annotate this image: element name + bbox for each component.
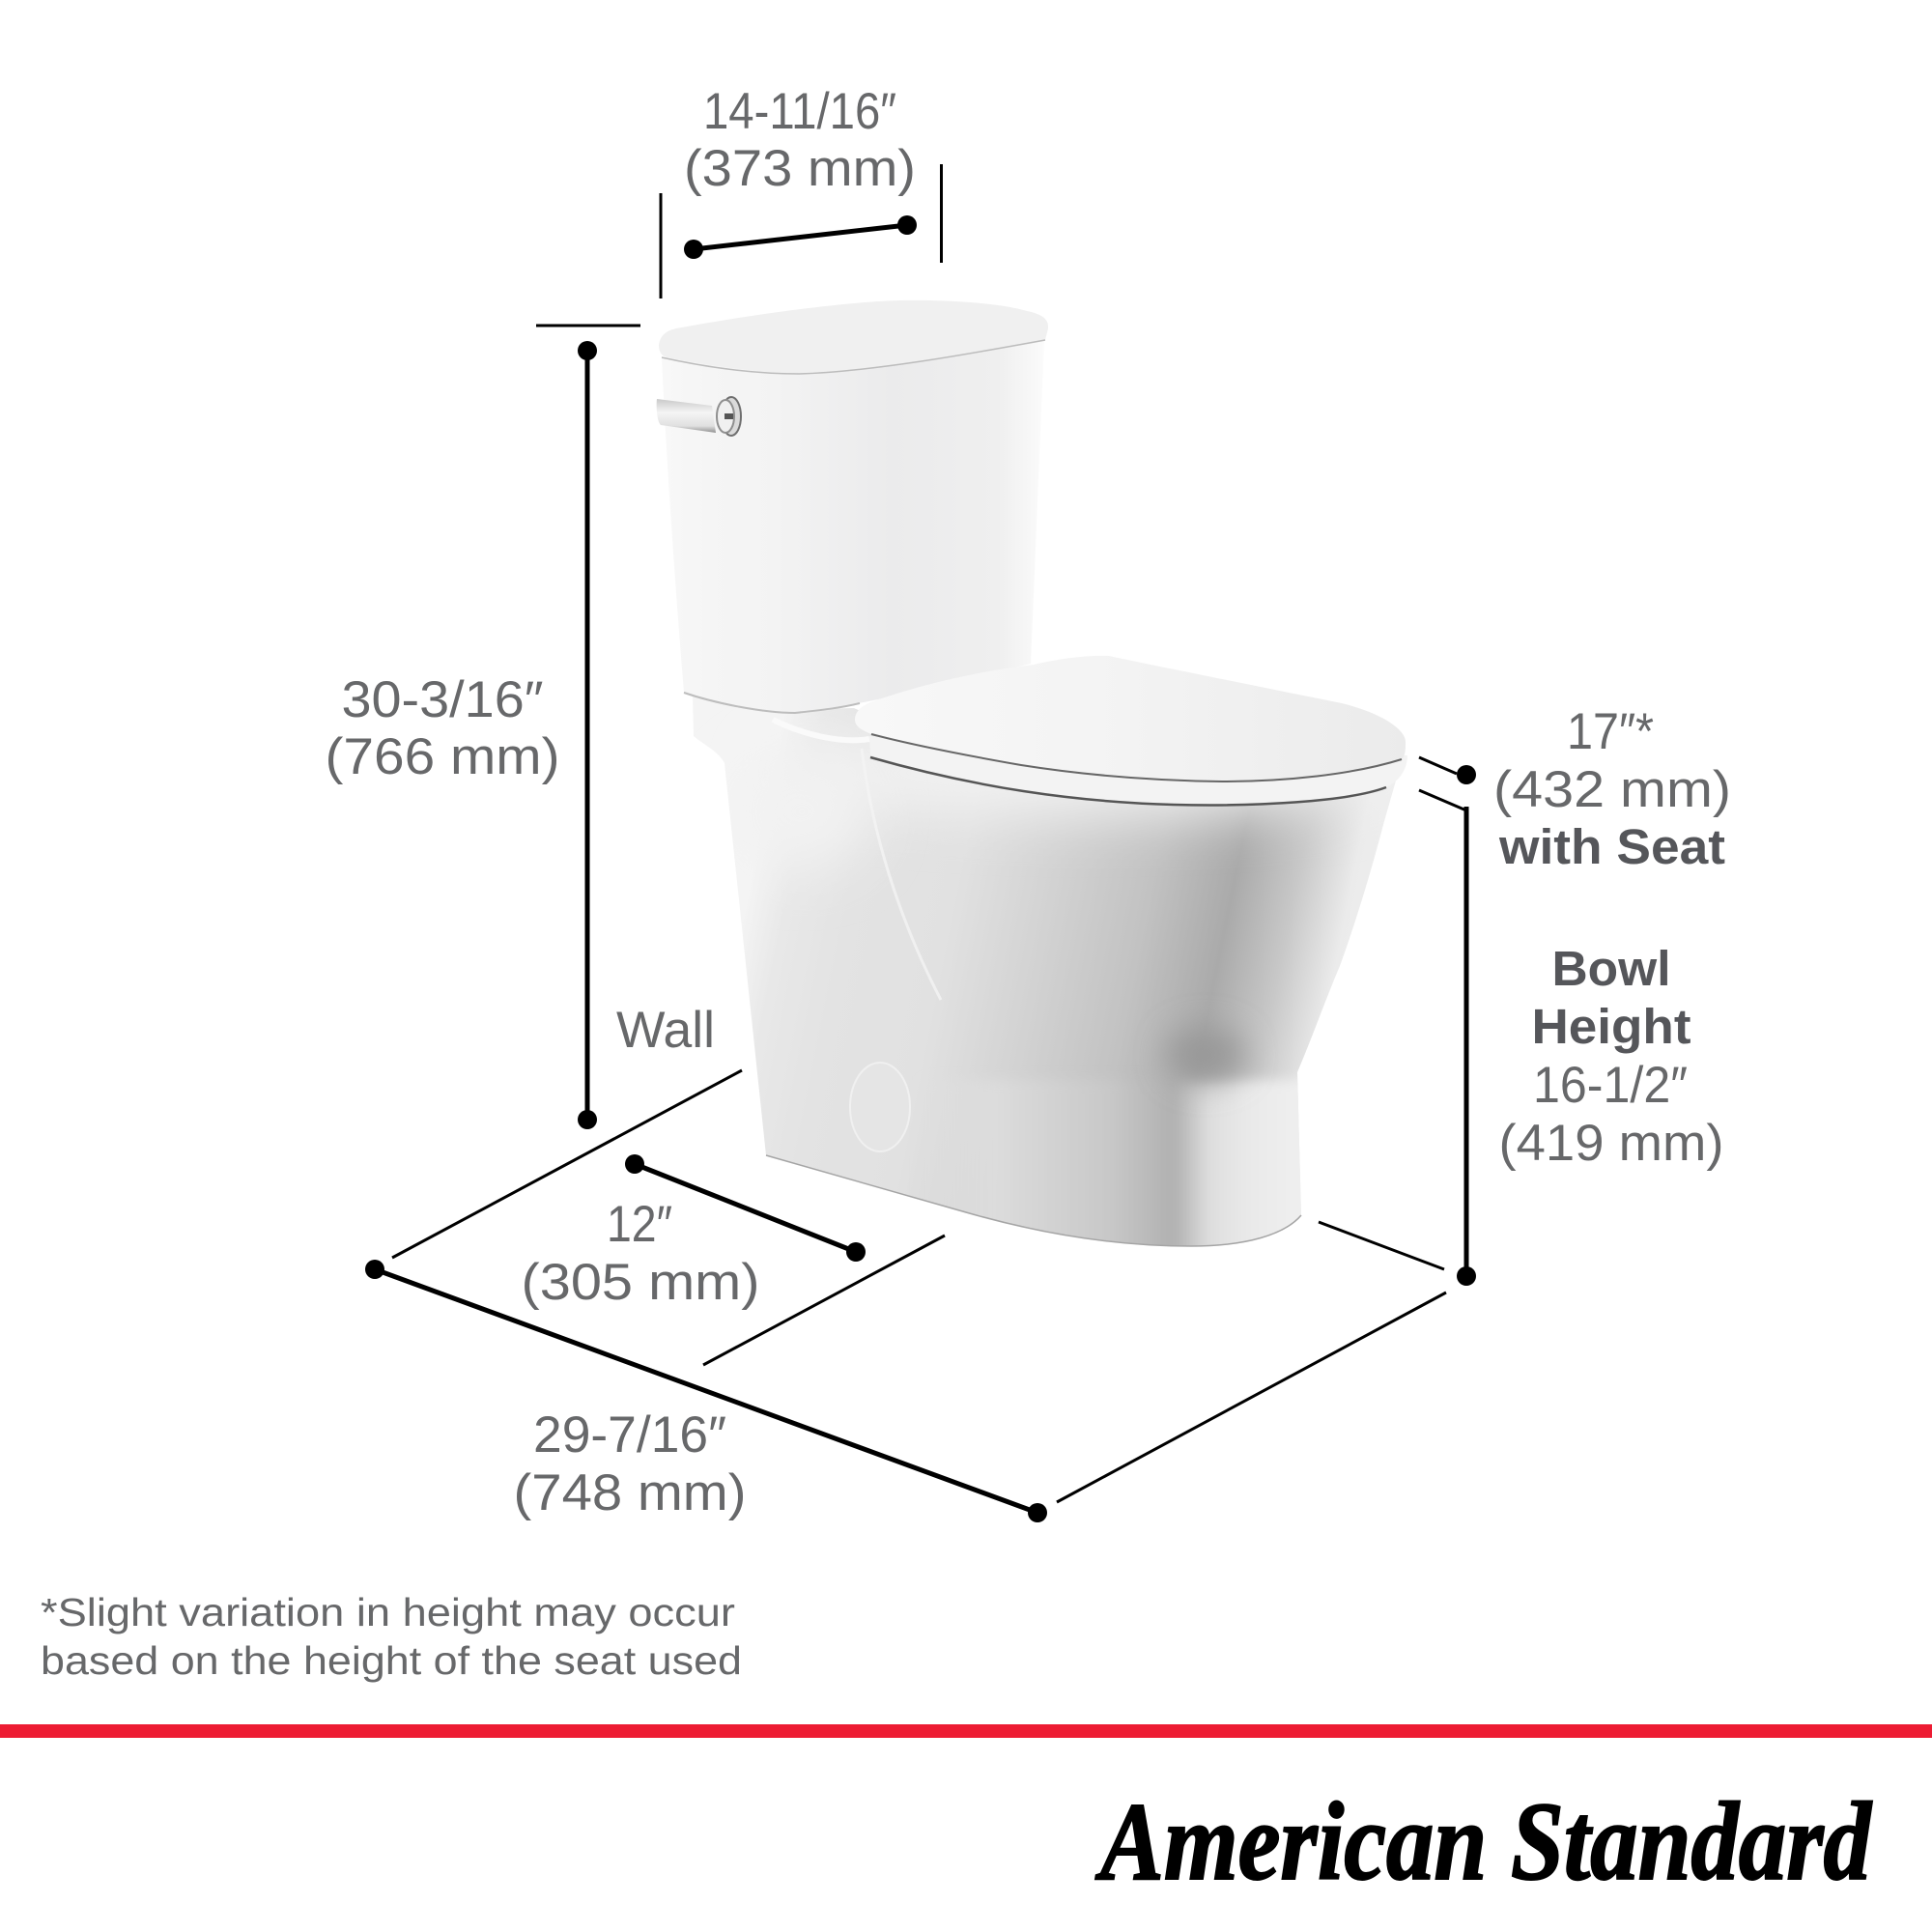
tank body [662,340,1044,713]
label: height with seat: (432 mm) [1493,761,1731,818]
seat lid lower edge [871,734,1402,781]
neck ledge highlight [773,720,869,740]
dimension: tank width [661,83,941,298]
footnote: *Slight variation in height may occur [41,1590,735,1634]
dimension: rough-in 12 inch: (305 mm) [522,1254,759,1311]
dimension: rough-in 12 inch [522,1154,866,1311]
bowl bottom edge [766,1155,1301,1246]
toilet seat ring [869,736,1407,804]
bowl side crease [862,749,941,1000]
red divider bar [0,1724,1932,1738]
tank lid [659,300,1048,374]
dimension: overall height: 30-3/16″ [342,671,543,728]
label: bowl height: 16-1/2″ [1533,1057,1688,1114]
dimension: tank width: (373 mm) [684,140,916,197]
dimension: overall height [325,326,640,1129]
toilet seat lid [855,656,1406,781]
dimension: overall depth: 29-7/16″ [533,1406,726,1463]
side cap [850,1063,910,1151]
flush handle [657,397,741,436]
dimension: wall label and floor outline: Wall [616,1002,715,1059]
label: height with seat: with Seat [1498,819,1725,874]
dimension: overall depth [365,1260,1047,1522]
dimension: overall height: (766 mm) [325,728,560,785]
label: bowl height: (419 mm) [1499,1115,1723,1172]
dimension: wall label and floor outline [392,1002,1446,1502]
tank shadow line [684,693,860,713]
label: bowl height [1499,941,1723,1172]
toilet illustration [657,300,1430,1275]
dimension: bowl height markers [1419,757,1476,1286]
lid seam [662,340,1045,374]
label: height with seat [1493,703,1731,874]
label: bowl height: Bowl [1551,941,1671,996]
label: height with seat: 17″* [1567,703,1654,760]
toilet bowl and pedestal body [693,696,1395,1246]
footnote [41,1590,742,1683]
dimension: overall depth: (748 mm) [514,1464,746,1521]
label: bowl height: Height [1532,999,1691,1054]
seat gap line [870,757,1386,805]
dimension: rough-in 12 inch: 12″ [607,1196,672,1253]
footnote: based on the height of the seat used [41,1638,742,1683]
dimension: tank width: 14-11/16″ [703,83,896,140]
